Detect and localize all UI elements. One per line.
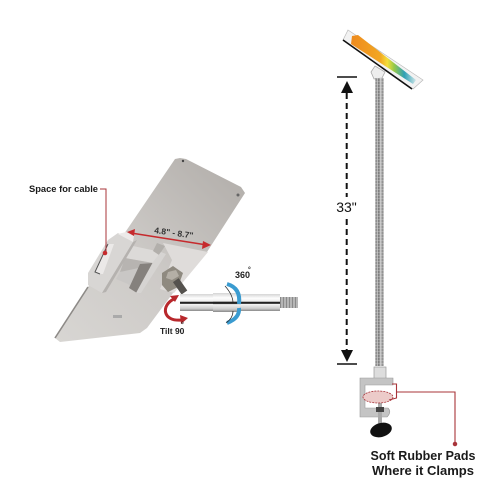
metal rod [180,293,298,312]
tablet mount [371,66,385,79]
label: soft rubber pads: Soft Rubber Pads [370,448,476,463]
callout line: rubber pads [389,384,457,446]
height dimension [337,77,357,364]
tablet back [55,158,245,342]
label: tablet width: 4.8" - 8.7" [154,225,194,240]
left clamp [88,233,133,293]
label: 33 inches: 33" [336,199,357,215]
callout: space for cable: Space for cable [29,184,98,195]
label: soft rubber pads: Where it Clamps [372,463,474,478]
panel: tablet close-up: ° [181,321,184,329]
label: 360: 360 [235,270,250,280]
bracket: tablet holder [88,232,208,293]
width arrow [127,229,211,249]
clamp knob [369,420,393,440]
label: tilt 90: Tilt 90 [160,326,185,336]
rotation arrow: 360 [225,284,239,323]
tablet side view [343,30,423,89]
label: soft rubber pads [370,448,476,478]
ball joint nut [162,266,187,294]
panel: tablet close-up [29,158,298,342]
gooseneck [376,78,384,366]
collar [374,367,386,382]
panel: full stand [336,30,476,478]
logo mark on tablet [113,315,122,318]
panel: tablet close-up: ° [248,266,251,274]
rotation arrow: tilt 90 [165,295,188,324]
plate: right clamp [160,243,208,293]
callout: space for cable [29,184,107,255]
desk clamp [360,378,393,430]
